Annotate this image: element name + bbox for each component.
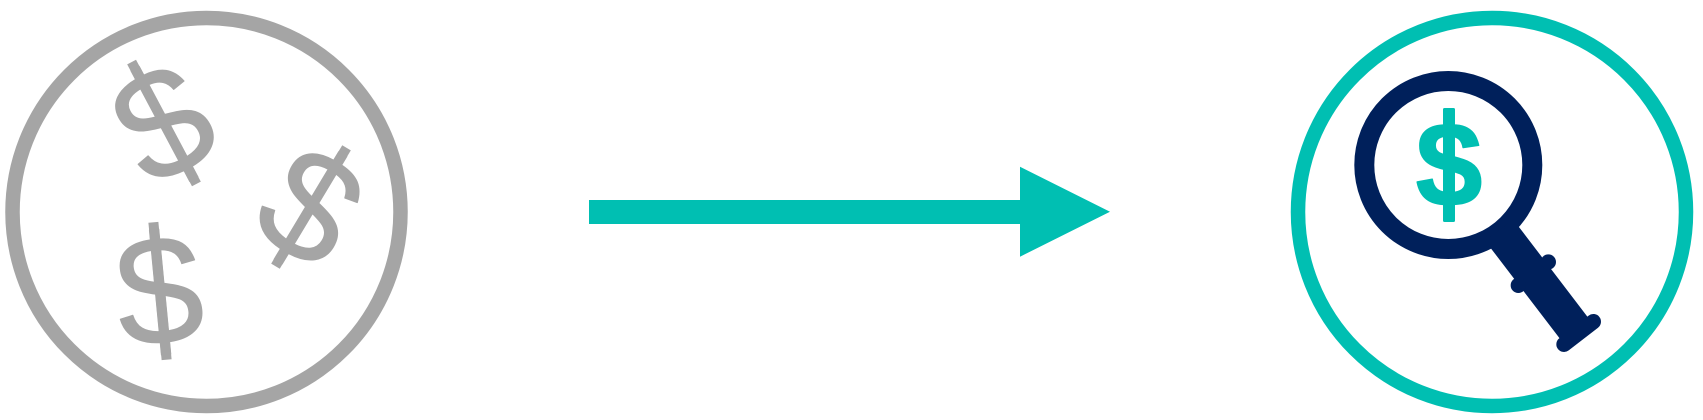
teal circle outline (1298, 18, 1686, 406)
arrow (589, 167, 1110, 257)
icon: dollar sign top: $ (84, 26, 242, 220)
icon: dollar sign right: $ (229, 110, 392, 303)
panel: grey circle with scattered dollars (12, 18, 400, 406)
icon: dollar sign bottom: $ (108, 200, 210, 381)
panel: teal circle with magnifier (1298, 18, 1686, 406)
grey circle outline (12, 18, 400, 406)
icon: magnifying glass (1364, 81, 1593, 344)
magnifier lens ring (1364, 81, 1532, 249)
icon: teal dollar sign: $ (1416, 98, 1482, 232)
magnifier handle (1485, 220, 1593, 344)
